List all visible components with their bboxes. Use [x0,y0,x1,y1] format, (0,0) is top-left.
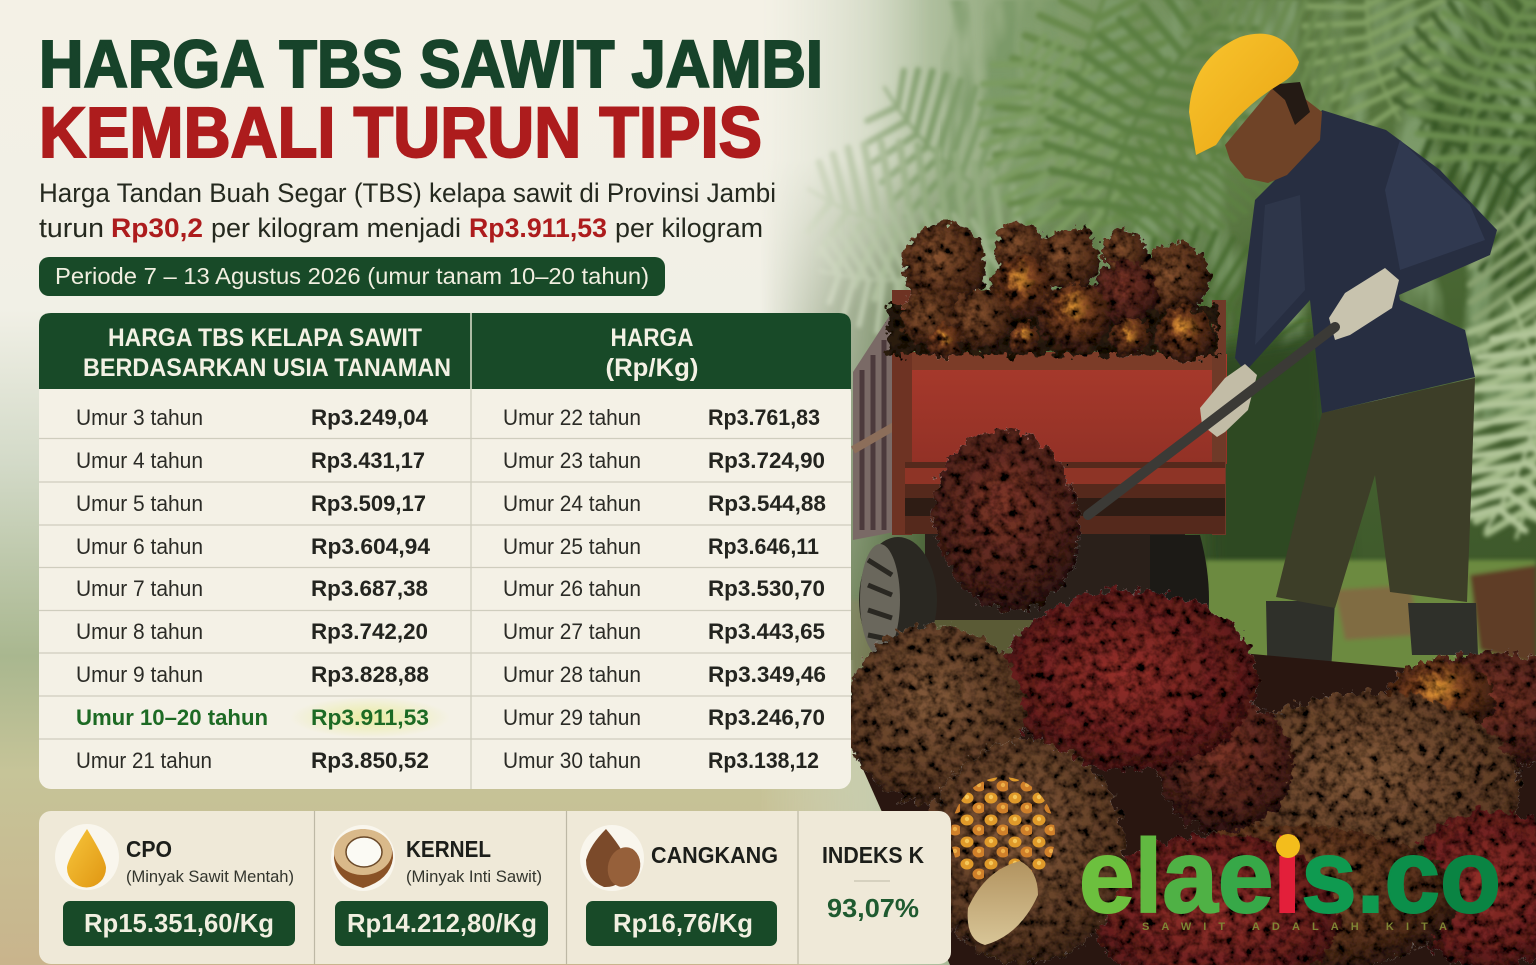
subtitle text: turun [39,213,104,243]
panel: cangkang: Rp16,76/Kg [613,908,753,938]
highlight glow [290,697,450,738]
left column rows: Rp3.604,94 [311,534,431,559]
left column rows: Rp3.509,17 [311,491,426,516]
commodity price panel [39,811,951,964]
table header: HARGA TBS KELAPA SAWIT [108,324,422,352]
left column rows [76,405,431,773]
subtitle text: Rp30,2 [111,213,203,243]
boots [1266,601,1478,697]
logo: elaeis.co: SAWIT ADALAH KITA [1142,921,1447,933]
table header [39,313,851,389]
subtitle text: Harga Tandan Buah Segar (TBS) kelapa sawit di Provinsi Jambi [39,178,776,208]
left column rows: Umur 9 tahun [76,662,203,687]
right column rows: Rp3.544,88 [708,491,826,516]
table body [39,380,851,789]
right column rows: Rp3.724,90 [708,448,825,473]
fruit bunch pile [845,430,1536,965]
subtitle text: per kilogram menjadi [211,213,461,243]
left column rows: Rp3.742,20 [311,619,428,644]
panel: cangkang [580,825,778,946]
right column rows: Rp3.646,11 [708,534,819,559]
panel: indeks K: INDEKS K [822,842,924,868]
worker with helmet and shovel [1088,34,1497,697]
table header: HARGA [610,324,694,352]
left column rows: Rp3.687,38 [311,576,428,601]
left column rows: Umur 6 tahun [76,534,203,559]
left column rows: Umur 7 tahun [76,576,203,601]
cut stalk [968,861,1038,945]
left column rows: Umur 5 tahun [76,491,203,516]
panel: CPO: CPO [126,836,172,862]
table header: BERDASARKAN USIA TANAMAN [83,354,451,382]
right column rows: Umur 24 tahun [503,491,641,516]
distant foliage behind worker [1200,330,1340,600]
left column rows: Rp3.911,53 [311,705,429,730]
right column rows: Umur 25 tahun [503,534,641,559]
right column rows: Rp3.530,70 [708,576,825,601]
bunch on shovel [933,430,1080,612]
icon: oil drop [55,824,119,890]
title: KEMBALI TURUN TIPIS [39,94,762,173]
left column rows: Umur 21 tahun [76,748,212,773]
right column rows: Rp3.443,65 [708,619,825,644]
left column rows: Rp3.828,88 [311,662,429,687]
left column rows: Rp3.850,52 [311,748,429,773]
right column rows: Umur 22 tahun [503,405,641,430]
truck body [905,354,1227,464]
panel: CPO [55,824,295,946]
panel: kernel: Rp14.212,80/Kg [347,908,537,938]
left column rows: Umur 4 tahun [76,448,203,473]
right column rows: Rp3.246,70 [708,705,825,730]
left column rows: Umur 8 tahun [76,619,203,644]
left column rows: Rp3.249,04 [311,405,429,430]
right column rows: Rp3.138,12 [708,748,819,773]
trousers [1276,378,1475,608]
period pill: Periode 7 – 13 Agustus 2026 (umur tanam 10–20 tahun) [55,263,649,289]
panel: kernel: KERNEL [406,836,491,862]
right column rows: Rp3.761,83 [708,405,820,430]
left column rows: Umur 10–20 tahun [76,705,268,730]
truck undercarriage and wheels [859,530,1209,663]
right column rows: Umur 30 tahun [503,748,641,773]
subtitle text: per kilogram [615,213,763,243]
shovel [1088,327,1335,515]
title: HARGA TBS SAWIT JAMBI [39,27,823,102]
truck side panel [853,292,905,540]
orange fruit bunch [925,740,1125,964]
right column rows [503,405,826,773]
panel: CPO: Rp15.351,60/Kg [84,908,274,938]
truck with fruit load [853,222,1227,663]
panel: indeks K: 93,07% [827,893,919,923]
right column rows: Umur 23 tahun [503,448,641,473]
shirt [1235,110,1497,413]
icon: kernel [331,825,395,891]
subtitle text: Rp3.911,53 [469,213,607,243]
panel background [39,811,951,964]
right column rows: Rp3.349,46 [708,662,826,687]
right column rows: Umur 29 tahun [503,705,641,730]
period pill [39,257,665,296]
panel: indeks K [822,842,924,923]
panel: kernel: (Minyak Inti Sawit) [406,868,542,886]
logo: elaeis.co: elaeis.co [1079,819,1501,935]
right column rows: Umur 26 tahun [503,576,641,601]
face and neck [1225,85,1322,183]
right column rows: Umur 28 tahun [503,662,641,687]
panel: cangkang: CANGKANG [651,842,778,868]
icon: shells [580,825,645,891]
left cream fade backdrop [0,0,1000,965]
photo background: palm plantation [700,0,1536,965]
panel: kernel [331,825,548,946]
title [39,27,823,173]
table header: (Rp/Kg) [606,354,698,382]
right column rows: Umur 27 tahun [503,619,641,644]
panel: CPO: (Minyak Sawit Mentah) [126,868,294,886]
ground [850,560,1536,700]
left column rows: Umur 3 tahun [76,405,203,430]
price table [39,313,851,789]
gloves [1200,268,1399,437]
left column rows: Rp3.431,17 [311,448,425,473]
subtitle text [39,178,776,243]
fruit load on truck [888,222,1218,363]
helmet [1189,34,1299,155]
